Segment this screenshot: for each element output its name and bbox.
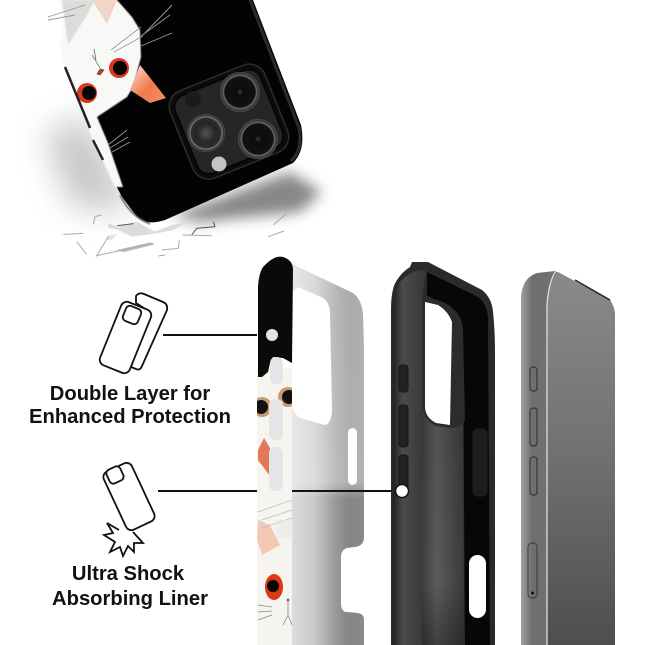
- burst: [104, 523, 143, 556]
- cat nose: [92, 49, 104, 75]
- heading: ultra shock: Ultra Shock: [72, 563, 185, 585]
- marker dot: [396, 484, 408, 498]
- liner cavity: [427, 272, 490, 645]
- liner buttons: [399, 365, 408, 493]
- liner back panel shading: [422, 400, 464, 645]
- black top of strip: [258, 257, 293, 377]
- cat eye right: [109, 58, 129, 78]
- phone camera: [105, 465, 125, 485]
- shell top highlight: [292, 264, 364, 537]
- shell grey body: [292, 264, 364, 645]
- liner window frame: [422, 296, 465, 428]
- drop shadow under top phone: [45, 115, 322, 222]
- camera island: [164, 59, 294, 184]
- inner black liner case: [391, 262, 495, 645]
- cracked floor shards: [63, 213, 287, 257]
- cat shading: [62, 0, 95, 45]
- top marker dot: [266, 329, 278, 341]
- camera lens 1: [220, 72, 260, 112]
- liner window: [425, 302, 452, 425]
- heading: absorbing liner: Absorbing Liner: [52, 588, 208, 610]
- strip button cut-outs: [269, 357, 291, 538]
- printed strip: [257, 368, 292, 645]
- cat right ear: [130, 65, 166, 103]
- shell side slot: [348, 428, 357, 485]
- connector line 2 right: [292, 490, 396, 492]
- icon: double layer case: [98, 293, 167, 375]
- camera lens 3: [238, 119, 278, 159]
- side edge marks: [65, 67, 103, 160]
- camera flash: [212, 156, 226, 172]
- icon: shock absorbing phone: [101, 461, 157, 556]
- cat body: [58, 0, 141, 187]
- camera sensor: [185, 91, 201, 107]
- phone top dark edge: [575, 280, 610, 300]
- liner side band: [393, 270, 426, 645]
- camera lens 2: [187, 114, 225, 152]
- phone frame: [521, 271, 615, 645]
- cat eye left: [77, 83, 97, 103]
- phone side view: [521, 271, 615, 645]
- liner side button: [472, 428, 488, 497]
- connector line 2 left: [158, 490, 257, 492]
- connector line 1: [163, 334, 257, 336]
- liner bottom slot: [469, 555, 486, 618]
- strip cat print: [257, 387, 292, 626]
- shell camera window: [292, 287, 332, 425]
- heading: double layer: Double Layer for: [50, 383, 210, 405]
- liner outline: [391, 262, 495, 645]
- whiskers: [48, 5, 172, 152]
- cat top ear: [92, 0, 117, 24]
- phone sim tray: [528, 543, 537, 598]
- heading: enhanced protection: Enhanced Protection: [29, 406, 231, 428]
- outer shell layer: [252, 257, 364, 645]
- liner back panel: [422, 400, 464, 645]
- top phone with cat case: [48, 0, 302, 224]
- case edge highlight: [250, 0, 300, 161]
- case body: [90, 0, 302, 222]
- phone buttons: [530, 367, 537, 495]
- phone screen: [547, 272, 615, 645]
- phone screen edge highlight: [547, 271, 556, 645]
- phone outline: [101, 461, 157, 532]
- case lower corner sheen: [120, 195, 150, 224]
